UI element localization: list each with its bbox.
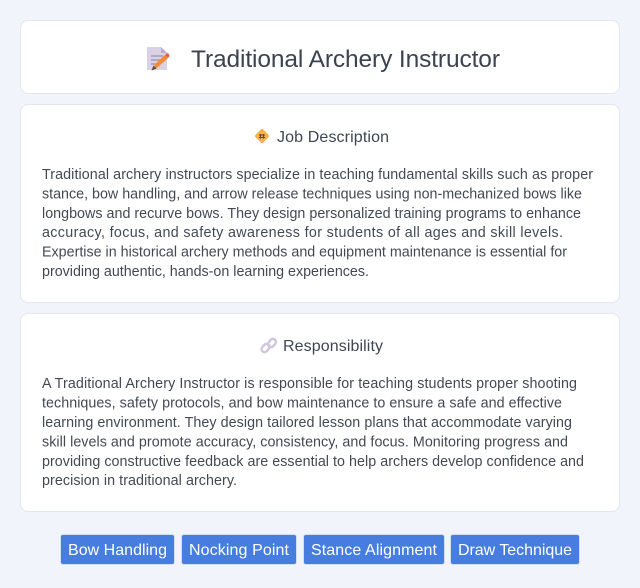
text block: responsibility: techniques, safety protocols, and bow maintenance to ensure a safe and effective (42, 396, 562, 412)
skill tags: Stance Alignment (311, 542, 438, 559)
text block: responsibility: skill levels and promote accuracy, consistency, and focus. Monitoring progress and (42, 434, 568, 450)
text block: responsibility: providing constructive feedback are essential to help archers develop confidence and (42, 454, 584, 470)
text block: responsibility: precision in traditional archery. (42, 473, 237, 489)
skill tags: Draw Technique (458, 542, 572, 559)
panel: responsibility card (20, 313, 620, 512)
text block: responsibility: learning environment. They design tailored lesson plans that accommodate varying (42, 415, 572, 431)
title: Traditional Archery Instructor (191, 46, 500, 73)
text block: job description: Traditional archery instructors specialize in teaching fundamental skills such as proper (42, 167, 593, 183)
icon: link (260, 338, 277, 353)
text block: job description: Expertise in historical archery methods and equipment maintenance is essential for (42, 244, 567, 260)
text block: responsibility: A Traditional Archery Instructor is responsible for teaching students proper shooting (42, 376, 577, 392)
heading: responsibility: Responsibility (283, 338, 383, 355)
text block: job description: stance, bow handling, and arrow release techniques using non-mechanized bows like (42, 186, 582, 202)
skill tags: Bow Handling (68, 542, 167, 559)
text block: job description: accuracy, focus, and safety awareness for students of all ages and skill levels. (42, 225, 563, 241)
icon: document with pencil (147, 47, 170, 70)
heading: job description: Job Description (277, 129, 389, 146)
skill tags: Nocking Point (189, 542, 290, 559)
icon: orange diamond sign (254, 128, 270, 144)
text block: job description: longbows and recurve bows. They design personalized training programs to enhance (42, 206, 581, 222)
panel: job description card (20, 104, 620, 303)
text block: job description (42, 167, 593, 280)
text block: job description: providing authentic, hands-on learning experiences. (42, 264, 369, 280)
panel: title card (20, 20, 620, 94)
text block: responsibility (42, 376, 584, 489)
skill tags (68, 542, 572, 559)
